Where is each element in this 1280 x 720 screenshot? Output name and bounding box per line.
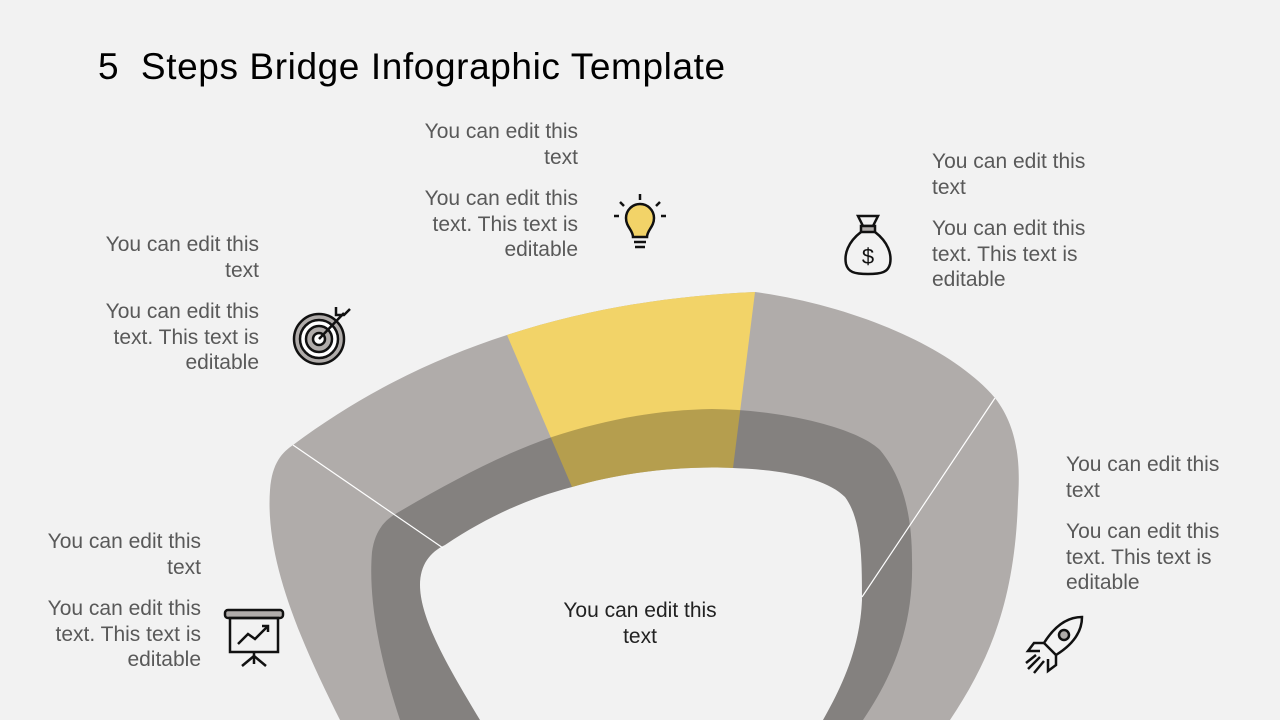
title: 5 Steps Bridge Infographic Template [98, 46, 726, 87]
dark inner band [371, 409, 912, 720]
text: step 1 [48, 530, 201, 671]
text: step 1: You can edit this text. This text is editable [48, 597, 201, 671]
text: step 1: You can edit this text [48, 530, 201, 578]
bridge chart [270, 292, 1019, 720]
icon: presentation board [224, 608, 284, 667]
icon: money bag [844, 214, 892, 276]
center text: You can edit this text [563, 599, 717, 648]
text: step 3 [425, 120, 578, 261]
icon: rocket [1025, 616, 1084, 674]
text: step 5: You can edit this text [1066, 453, 1219, 502]
text: step 4: You can edit this text [932, 150, 1085, 198]
icon: target [292, 307, 351, 366]
text: step 2: You can edit this text. This text is editable [106, 300, 259, 374]
text: step 5: You can edit this text. This text is editable [1066, 520, 1219, 594]
text: step 4: You can edit this text. This text is editable [932, 217, 1085, 291]
text: step 2: You can edit this text [106, 233, 259, 282]
text: step 3: You can edit this text. This text is editable [425, 187, 578, 261]
text: step 4 [932, 150, 1085, 291]
text: step 2 [106, 233, 259, 374]
icon: light bulb [614, 194, 666, 248]
icon: money bag: $ [862, 244, 874, 269]
text: step 3: You can edit this text [425, 120, 578, 168]
light band [270, 292, 1019, 720]
yellow segment [507, 292, 755, 487]
text: step 5 [1066, 453, 1219, 594]
